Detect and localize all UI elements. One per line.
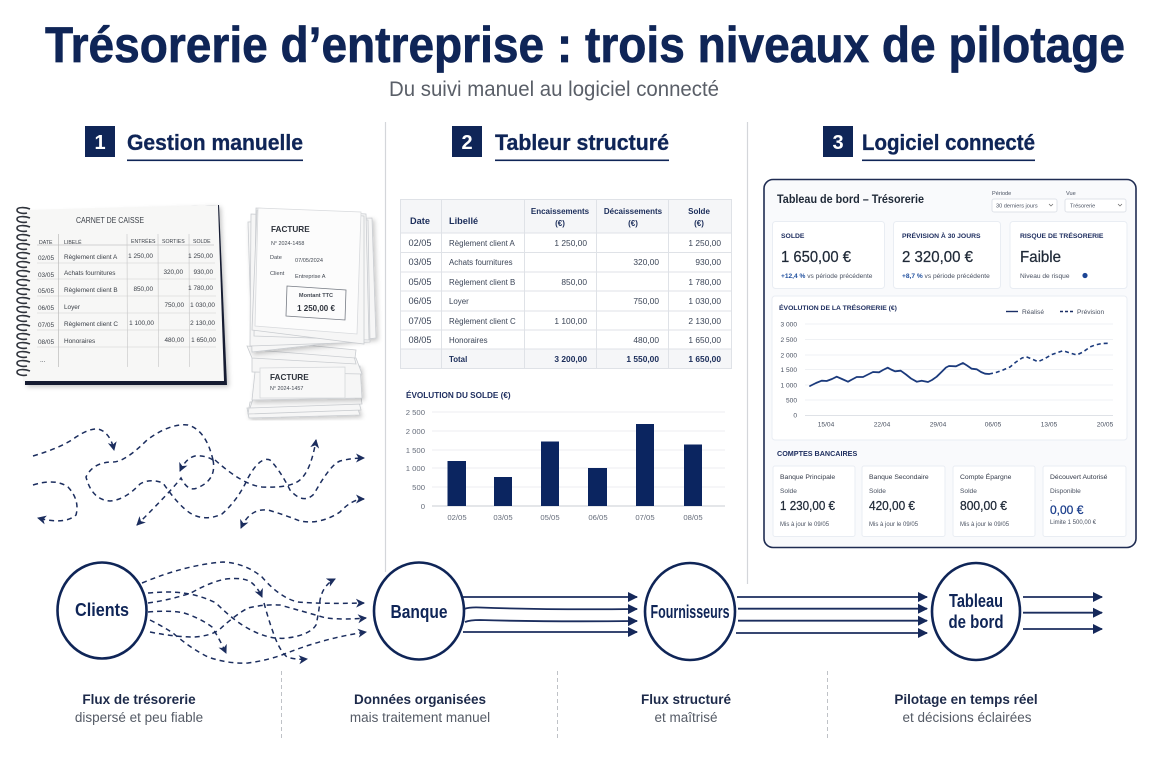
kpi: risque: Niveau de risque xyxy=(1020,273,1070,280)
panel: carnet de caisse: 2 130,00 xyxy=(190,320,215,327)
bar chart: évolution du solde: 03/05 xyxy=(493,513,513,522)
heading: tableur structuré xyxy=(452,126,669,161)
facture 2024-1457 xyxy=(260,367,345,398)
line chart: évolution de la trésorerie: 22/04 xyxy=(874,422,891,428)
caption: flux structuré xyxy=(641,692,731,725)
panel: tableur: 1 650,00 xyxy=(688,354,721,364)
compte: épargne: Mis à jour le 09/05 xyxy=(960,522,1010,528)
kpi: solde: SOLDE xyxy=(781,233,805,240)
panel: tableur: 03/05 xyxy=(408,257,432,267)
panel: carnet de caisse: 1 650,00 xyxy=(191,337,216,344)
panel: carnet de caisse: SORTIES xyxy=(162,239,185,245)
bar chart: évolution du solde: 2 500 xyxy=(406,408,425,417)
panel: carnet de caisse: 1 100,00 xyxy=(129,320,154,327)
panel: tableur: (€) xyxy=(555,219,565,228)
panel: tableur: 1 550,00 xyxy=(626,354,659,364)
panel: tableur: 750,00 xyxy=(633,296,659,306)
flux dispersés xyxy=(33,425,364,528)
compte: banque secondaire xyxy=(862,466,945,536)
heading: logiciel connecté: 3 xyxy=(832,132,844,154)
compte: découvert: Limite 1 500,00 € xyxy=(1050,520,1097,526)
line chart: évolution de la trésorerie: 2 000 xyxy=(780,352,797,360)
panel: carnet de caisse: 1 250,00 xyxy=(188,253,213,260)
panel: tableur: 1 100,00 xyxy=(554,316,587,326)
panel: carnet de caisse: DATE xyxy=(39,240,53,246)
compte: découvert: Découvert Autorisé xyxy=(1050,474,1108,481)
bar chart: évolution du solde: 2 000 xyxy=(406,427,425,436)
caption: flux de trésorerie xyxy=(75,692,203,725)
panel: carnet de caisse: 1 030,00 xyxy=(190,302,215,309)
bar chart: évolution du solde: 06/05 xyxy=(588,513,608,522)
facture 2024-1458: 1 250,00 € xyxy=(297,304,335,313)
subtitle: Du suivi manuel au logiciel connecté xyxy=(389,78,719,101)
panel: tableur: Encaissements xyxy=(531,207,590,216)
caption: données organisées: Données organisées xyxy=(354,692,486,707)
line chart: évolution de la trésorerie: 1 500 xyxy=(780,367,797,374)
panel: tableur: 02/05 xyxy=(408,238,432,248)
panel: carnet de caisse: Règlement client B xyxy=(64,287,118,294)
compte: banque principale: Solde xyxy=(780,488,797,495)
kpi: prévision: +8,7 % vs période précédente xyxy=(902,273,990,280)
node: fournisseurs: Fournisseurs xyxy=(650,602,730,622)
caption: données organisées xyxy=(350,692,490,725)
flux structurés fournisseurs vers tableau de bord xyxy=(736,597,927,633)
bar chart: évolution du solde: 08/05 xyxy=(683,513,703,522)
line chart: évolution de la trésorerie: 13/05 xyxy=(1041,422,1058,428)
panel: carnet de caisse: Loyer xyxy=(64,304,81,311)
panel: carnet de caisse: Honoraires xyxy=(64,338,95,345)
heading: logiciel connecté: Logiciel connecté xyxy=(862,130,1035,155)
bar chart: évolution du solde: 1 000 xyxy=(406,464,425,473)
panel: carnet de caisse: Règlement client A xyxy=(64,254,118,261)
bar chart: évolution du solde: ÉVOLUTION DU SOLDE (€) xyxy=(406,390,511,400)
panel: tableur: 1 650,00 xyxy=(688,335,721,345)
panel: carnet de caisse: 08/05 xyxy=(38,339,54,346)
comptes bancaires xyxy=(773,449,1126,536)
bar chart: évolution du solde: 02/05 xyxy=(447,513,467,522)
panel: tableur: Achats fournitures xyxy=(449,258,513,267)
panel: tableur: 08/05 xyxy=(408,335,432,345)
kpi: solde: 1 650,00 € xyxy=(781,249,851,266)
facture 2024-1458: Client xyxy=(270,271,285,277)
caption dividers xyxy=(282,671,828,740)
heading: tableur structuré: 2 xyxy=(461,132,473,154)
facture 2024-1458: Entreprise A xyxy=(295,274,326,280)
caption: pilotage: et décisions éclairées xyxy=(902,710,1032,725)
line chart: évolution de la trésorerie: 500 xyxy=(786,398,797,404)
compte: banque secondaire: Solde xyxy=(869,488,886,495)
panel: tableau de bord xyxy=(764,180,1136,548)
heading: gestion manuelle xyxy=(85,126,303,161)
flux organisés banque vers fournisseurs xyxy=(463,597,637,632)
panel: tableur: Total xyxy=(449,355,467,364)
panel: carnet de caisse: 480,00 xyxy=(164,337,184,344)
comptes bancaires: COMPTES BANCAIRES xyxy=(777,449,857,458)
panel: tableur: Loyer xyxy=(449,297,469,306)
facture 2024-1458: N° 2024-1458 xyxy=(271,241,304,247)
node: clients: Clients xyxy=(75,600,129,620)
compte: découvert: - xyxy=(1050,497,1052,504)
panel: pile de factures xyxy=(247,208,376,418)
panel: tableur: Règlement client B xyxy=(449,278,515,287)
bar chart: évolution du solde xyxy=(406,390,725,522)
kpi: prévision: 2 320,00 € xyxy=(902,249,973,266)
panel: tableur: 05/05 xyxy=(408,277,432,287)
caption: pilotage xyxy=(894,692,1038,725)
compte: épargne: 800,00 € xyxy=(960,499,1007,513)
panel: tableur xyxy=(400,199,732,369)
panel: tableur: 07/05 xyxy=(408,316,432,326)
line chart: évolution de la trésorerie: 0 xyxy=(793,412,797,420)
compte: découvert: Disponible xyxy=(1050,488,1081,495)
legend: Réalisé xyxy=(1022,309,1044,316)
kpi: prévision: PRÉVISION À 30 JOURS xyxy=(902,231,981,240)
panel: tableur: 1 780,00 xyxy=(688,277,721,287)
flux dispersés clients vers banque xyxy=(142,562,366,663)
facture 2024-1458: FACTURE xyxy=(271,225,310,234)
bar chart: évolution du solde: 1 500 xyxy=(406,446,425,455)
panel: tableur: (€) xyxy=(694,219,704,228)
heading: gestion manuelle: Gestion manuelle xyxy=(127,130,303,155)
compte: banque secondaire: 420,00 € xyxy=(869,499,915,513)
bar chart: évolution du solde: 0 xyxy=(421,502,425,511)
node: tableau de bord: de bord xyxy=(948,612,1004,632)
filter: période: 30 derniers jours xyxy=(996,204,1038,210)
caption: pilotage: Pilotage en temps réel xyxy=(894,692,1038,707)
panel: tableur: Date xyxy=(410,216,430,226)
line chart: évolution de la trésorerie: 06/05 xyxy=(985,422,1002,428)
caption: flux structuré: et maîtrisé xyxy=(654,710,718,725)
column dividers xyxy=(386,122,748,584)
panel: tableur: Libellé xyxy=(449,216,478,226)
bar chart: évolution du solde: 07/05 xyxy=(635,513,655,522)
panel: carnet de caisse: Achats fournitures xyxy=(64,270,116,277)
panel: tableur: Décaissements xyxy=(604,207,663,216)
heading: gestion manuelle: 1 xyxy=(94,132,106,154)
panel: carnet de caisse: Règlement client C xyxy=(64,321,118,328)
compte: banque principale: Mis à jour le 09/05 xyxy=(780,522,830,528)
panel: carnet de caisse: 1 780,00 xyxy=(188,285,213,292)
line chart: évolution de la trésorerie xyxy=(772,296,1127,440)
compte: épargne xyxy=(953,466,1035,536)
panel: tableur: 3 200,00 xyxy=(554,354,587,364)
panel: carnet de caisse: ... xyxy=(40,357,46,364)
panel: carnet de caisse: 1 250,00 xyxy=(128,253,153,260)
panel: carnet de caisse: 320,00 xyxy=(163,269,183,276)
panel: carnet de caisse: 750,00 xyxy=(164,302,184,309)
filter: vue: Vue xyxy=(1066,191,1076,197)
facture 2024-1458: 07/05/2024 xyxy=(295,258,323,264)
line chart: évolution de la trésorerie: 15/04 xyxy=(818,422,835,428)
panel: tableur: 320,00 xyxy=(633,257,659,267)
panel: tableur: Règlement client A xyxy=(449,239,516,248)
caption: flux de trésorerie: dispersé et peu fiable xyxy=(75,710,203,725)
facture 2024-1458: Montant TTC xyxy=(299,293,333,299)
node: clients xyxy=(58,562,146,658)
panel: carnet de caisse: 05/05 xyxy=(38,288,54,295)
caption: flux structuré: Flux structuré xyxy=(641,692,731,707)
node: banque: Banque xyxy=(390,602,448,622)
panel: carnet de caisse: 07/05 xyxy=(38,322,54,329)
caption: données organisées: mais traitement manuel xyxy=(350,710,490,725)
panel: tableur: Solde xyxy=(688,207,710,216)
panel: tableur: 1 030,00 xyxy=(688,296,721,306)
compte: banque secondaire: Mis à jour le 09/05 xyxy=(869,522,919,528)
compte: banque principale: 1 230,00 € xyxy=(780,499,835,513)
kpi: prévision xyxy=(894,222,1000,288)
panel: tableur: Règlement client C xyxy=(449,317,516,326)
kpi: risque xyxy=(1010,222,1127,288)
compte: découvert xyxy=(1043,466,1126,536)
facture 2024-1458: Date xyxy=(270,255,282,261)
panel: carnet de caisse: 03/05 xyxy=(38,272,54,279)
panel: tableur: 930,00 xyxy=(695,257,721,267)
spiral binding xyxy=(17,208,30,375)
panel: tableur: 2 130,00 xyxy=(688,316,721,326)
panel: carnet de caisse: 02/05 xyxy=(38,255,54,262)
caption: flux de trésorerie: Flux de trésorerie xyxy=(82,692,196,707)
line chart: évolution de la trésorerie: 29/04 xyxy=(930,422,947,428)
filter: vue xyxy=(1065,191,1126,212)
compte: épargne: Compte Épargne xyxy=(960,472,1012,481)
compte: banque secondaire: Banque Secondaire xyxy=(869,474,929,481)
panel: tableur: 850,00 xyxy=(561,277,587,287)
kpi: risque: Faible xyxy=(1020,249,1061,266)
line chart: évolution de la trésorerie: 2 500 xyxy=(780,337,797,344)
panel: carnet de caisse xyxy=(17,205,227,385)
heading: tableur structuré: Tableur structuré xyxy=(495,130,669,155)
panel: carnet de caisse: 930,00 xyxy=(193,269,213,276)
panel: tableur: 480,00 xyxy=(633,335,659,345)
line chart: évolution de la trésorerie: ÉVOLUTION DE LA TRÉSORERIE (€) xyxy=(779,303,897,312)
kpi: solde xyxy=(772,222,884,288)
node: tableau de bord xyxy=(932,563,1020,660)
node: fournisseurs xyxy=(645,563,735,660)
bar chart: évolution du solde: 05/05 xyxy=(540,513,560,522)
line chart: évolution de la trésorerie: 1 000 xyxy=(780,382,797,390)
panel: tableur: 06/05 xyxy=(408,296,432,306)
filter: vue: Trésorerie xyxy=(1070,204,1095,210)
facture 2024-1457: FACTURE xyxy=(270,373,309,382)
line chart: évolution de la trésorerie: 3 000 xyxy=(780,322,797,328)
panel: carnet de caisse: 850,00 xyxy=(133,286,153,293)
heading: logiciel connecté xyxy=(823,126,1035,161)
kpi: risque: RISQUE DE TRÉSORERIE xyxy=(1020,231,1104,240)
panel: carnet de caisse: 06/05 xyxy=(38,305,54,312)
compte: épargne: Solde xyxy=(960,488,977,495)
dashboard title: Tableau de bord – Trésorerie xyxy=(777,192,924,206)
legend: Prévision xyxy=(1077,309,1104,316)
compte: découvert: 0,00 € xyxy=(1050,503,1084,517)
bar chart: évolution du solde: 500 xyxy=(412,483,425,492)
panel: carnet de caisse: CARNET DE CAISSE xyxy=(76,215,144,225)
panel: carnet de caisse: ENTRÉES xyxy=(131,238,156,245)
panel: tableur: 1 250,00 xyxy=(688,238,721,248)
panel: tableur: (€) xyxy=(628,219,638,228)
facture 2024-1458 xyxy=(255,208,361,334)
legend xyxy=(1006,309,1104,316)
filter: période: Période xyxy=(992,191,1011,197)
node: tableau de bord: Tableau xyxy=(949,591,1003,611)
panel: tableur: 1 250,00 xyxy=(554,238,587,248)
line chart: évolution de la trésorerie: 20/05 xyxy=(1097,422,1114,428)
facture 2024-1457: N° 2024-1457 xyxy=(270,386,303,392)
compte: banque principale xyxy=(773,466,855,536)
panel: tableur: Honoraires xyxy=(449,336,488,345)
node: banque xyxy=(374,562,464,660)
panel: carnet de caisse: LIBELÉ xyxy=(64,239,82,246)
kpi: solde: +12,4 % vs période précédente xyxy=(781,273,873,280)
compte: banque principale: Banque Principale xyxy=(780,474,835,481)
filter: période xyxy=(992,191,1057,212)
flux de sortie tableau de bord xyxy=(1023,597,1102,629)
panel: carnet de caisse: SOLDE xyxy=(193,239,211,245)
